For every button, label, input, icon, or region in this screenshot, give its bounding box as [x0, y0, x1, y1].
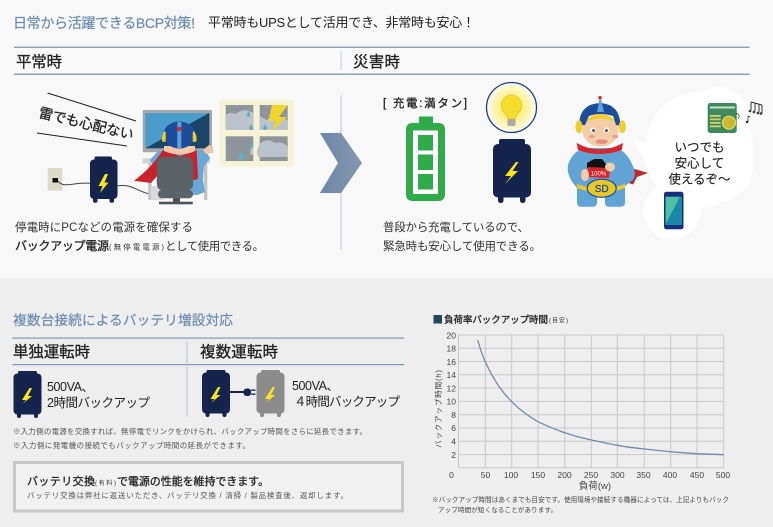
- chart footnote: [432, 495, 729, 514]
- x axis labels: 350: [636, 470, 651, 480]
- panel: multiple operation: [202, 370, 400, 417]
- headline: 平常時もUPSとして活用でき、非常時も安心！: [208, 15, 475, 30]
- text: multiple spec: ４時間バックアップ: [294, 395, 400, 409]
- text: normal time description: 停電時にPCなどの電源を確保する: [15, 220, 193, 234]
- chart title: (目安): [549, 316, 568, 324]
- text: single spec: [47, 380, 150, 410]
- icon: UPS: [493, 139, 531, 203]
- speech text: 安心して: [675, 156, 724, 170]
- text: single spec: 500VA、: [47, 380, 94, 394]
- headline: [13, 15, 475, 31]
- y axis labels: 16: [447, 357, 456, 367]
- x axis labels: 400: [663, 470, 677, 480]
- x axis labels: 150: [531, 470, 545, 480]
- x axis labels: 50: [481, 470, 490, 480]
- y axis labels: 20: [447, 330, 456, 340]
- y axis labels: 4: [451, 436, 456, 446]
- icon: smartphone: [664, 192, 684, 229]
- speech text: [668, 140, 731, 186]
- y axis labels: 10: [447, 396, 456, 406]
- window with storm: [219, 99, 294, 166]
- text: multiple spec: [292, 379, 400, 409]
- character: superhero front: SD: [595, 184, 609, 195]
- panel: single operation: [14, 371, 150, 418]
- icon: full battery: [406, 116, 445, 201]
- office chair: [157, 157, 193, 204]
- chart footnote: ※バックアップ時間はあくまでも目安です。使用環境や接続する機器によっては、上記よりもバック: [432, 495, 729, 504]
- chart title: 負荷率バックアップ時間: [444, 314, 548, 326]
- speech text: 使えるぞ〜: [668, 172, 731, 186]
- notes: ※入力側の電源を交換すれば、無停電でリンクをかけられ、バックアップ時間をさらに延長できます。: [13, 426, 367, 436]
- x axis title: 負荷(w): [579, 480, 611, 492]
- text: disaster time description: 普段から充電しているので、: [383, 220, 529, 234]
- speech text: いつでも: [674, 140, 725, 154]
- heading: disaster time: 災害時: [353, 53, 400, 71]
- icon: UPS: [90, 156, 118, 203]
- icon: music notes: [736, 102, 762, 123]
- grid: [458, 335, 724, 468]
- x axis labels: [449, 470, 730, 480]
- desk: [143, 158, 210, 200]
- callout: battery replacement: バッテリ交換は弊社に返送いただき、バッテリ交換 / 清掃 / 製品検査後、返却します。: [27, 490, 348, 500]
- notes: ※入力側に発電機の接続でもバックアップ時間の延長ができます。: [13, 440, 250, 450]
- icon: UPS: [14, 371, 42, 418]
- heading: single operation: 単独運転時: [13, 343, 90, 361]
- label: charged full: [ 充電:満タン]: [383, 97, 467, 110]
- icon: connecting cable: [230, 388, 256, 396]
- callout: battery replacement: (有料): [95, 479, 116, 487]
- cables: [58, 181, 150, 194]
- character: superhero front: 100%: [591, 172, 607, 178]
- chart footnote: アップ時間が短くなることがあります。: [438, 505, 557, 514]
- icon: wall outlet: [48, 168, 62, 191]
- headline: 日常から活躍できるBCP対策!: [13, 15, 195, 31]
- y axis labels: 18: [447, 344, 456, 354]
- y axis title: バックアップ時間(h): [434, 370, 443, 448]
- text: disaster time description: 緊急時も安心して使用できる。: [383, 239, 541, 253]
- x axis labels: 200: [557, 470, 572, 480]
- speech bubble: [632, 87, 762, 240]
- y axis labels: 2: [451, 450, 456, 460]
- callout: no worry about lightning: 雷でも心配ない: [37, 104, 135, 143]
- x axis labels: 0: [449, 470, 454, 480]
- x axis labels: 100: [504, 470, 518, 480]
- curve: [478, 340, 724, 455]
- arrow: chevron: [320, 133, 362, 193]
- icon: radio: [708, 103, 737, 133]
- heading: normal time: 平常時: [16, 53, 62, 71]
- icon: light bulb: [486, 82, 536, 132]
- y axis labels: 14: [447, 370, 456, 380]
- heading: multiple battery: 複数台接続によるバッテリ増設対応: [13, 312, 233, 328]
- text: normal time description: バックアップ電源: [15, 239, 109, 253]
- text: single spec: 2時間バックアップ: [47, 396, 150, 410]
- y axis labels: 6: [451, 423, 456, 433]
- character: superhero front: [568, 96, 648, 207]
- panel: normal time illustration: [37, 93, 294, 204]
- y axis labels: 12: [447, 384, 456, 394]
- panel: disaster time illustration: [383, 82, 762, 240]
- icon: gray UPS: [256, 370, 284, 417]
- notes: [13, 426, 367, 450]
- x axis labels: 500: [716, 470, 730, 480]
- callout: battery replacement: で電源の性能を維持できます。: [117, 474, 269, 488]
- y axis labels: 8: [451, 410, 456, 420]
- text: disaster time description: [383, 220, 541, 253]
- x axis labels: 300: [610, 470, 625, 480]
- callout: battery replacement: [14, 462, 402, 511]
- icon: UPS: [202, 370, 230, 417]
- x axis labels: 250: [584, 470, 598, 480]
- y axis labels: [447, 330, 456, 460]
- text: normal time description: [15, 220, 264, 253]
- text: normal time description: として使用できる。: [165, 239, 264, 253]
- heading: multiple operation: 複数運転時: [200, 343, 278, 361]
- chart: backup time by load: [434, 314, 730, 492]
- x axis labels: 450: [690, 470, 704, 480]
- character from behind: [134, 122, 214, 195]
- text: multiple spec: 500VA、: [292, 379, 339, 393]
- text: normal time description: (無停電電源): [109, 242, 164, 252]
- monitor: [143, 110, 212, 152]
- callout: battery replacement: バッテリ交換: [27, 475, 95, 488]
